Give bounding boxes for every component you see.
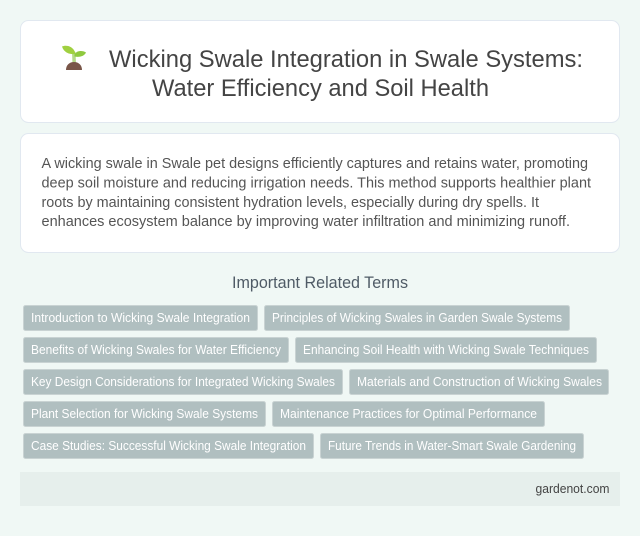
tag: soil health xyxy=(296,338,596,362)
title text xyxy=(109,46,583,102)
tag: principles: Principles of Wicking Swales in Garden Swale Systems xyxy=(272,311,562,325)
icon: seedling xyxy=(62,46,86,70)
title text: Wicking Swale Integration in Swale Systems: xyxy=(109,46,583,73)
tag: benefits xyxy=(24,338,288,362)
tag: introduction xyxy=(24,306,258,330)
panel: description card xyxy=(20,134,620,252)
tag: introduction: Introduction to Wicking Swale Integration xyxy=(31,311,250,325)
description text: roots by maintaining consistent hydration levels, especially during dry spells. It xyxy=(42,194,540,211)
panel: title card xyxy=(20,20,620,122)
description text: deep soil moisture and reducing irrigation needs. This method supports healthier plant xyxy=(42,174,592,192)
tag: maintenance xyxy=(272,402,544,426)
tag: benefits: Benefits of Wicking Swales for Water Efficiency xyxy=(31,343,282,357)
tag: plant selection: Plant Selection for Wicking Swale Systems xyxy=(31,407,258,421)
tag: design considerations xyxy=(24,370,342,394)
tag: plant selection xyxy=(24,402,266,426)
tag: future trends: Future Trends in Water-Smart Swale Gardening xyxy=(328,439,576,453)
tag: future trends xyxy=(320,434,584,458)
tag: case studies xyxy=(24,434,314,458)
description text: A wicking swale in Swale pet designs efficiently captures and retains water, promoting xyxy=(42,155,588,172)
tag: principles xyxy=(264,306,570,330)
tag: materials xyxy=(350,370,608,394)
heading: important related terms: Important Related Terms xyxy=(232,274,408,292)
related terms tags xyxy=(24,306,608,458)
tag: case studies: Case Studies: Successful Wicking Swale Integration xyxy=(31,439,306,453)
tag: materials: Materials and Construction of Wicking Swales xyxy=(357,375,602,389)
tag: soil health: Enhancing Soil Health with Wicking Swale Techniques xyxy=(303,343,589,357)
tag: design considerations: Key Design Considerations for Integrated Wicking Swales xyxy=(31,375,335,389)
title text: Water Efficiency and Soil Health xyxy=(152,75,489,102)
footer bar xyxy=(20,472,620,506)
description text xyxy=(42,155,592,230)
tag: maintenance: Maintenance Practices for Optimal Performance xyxy=(280,407,537,421)
footer text: gardenot.com xyxy=(536,481,610,496)
description text: enhances ecosystem balance by improving water infiltration and minimizing runoff. xyxy=(42,213,570,230)
